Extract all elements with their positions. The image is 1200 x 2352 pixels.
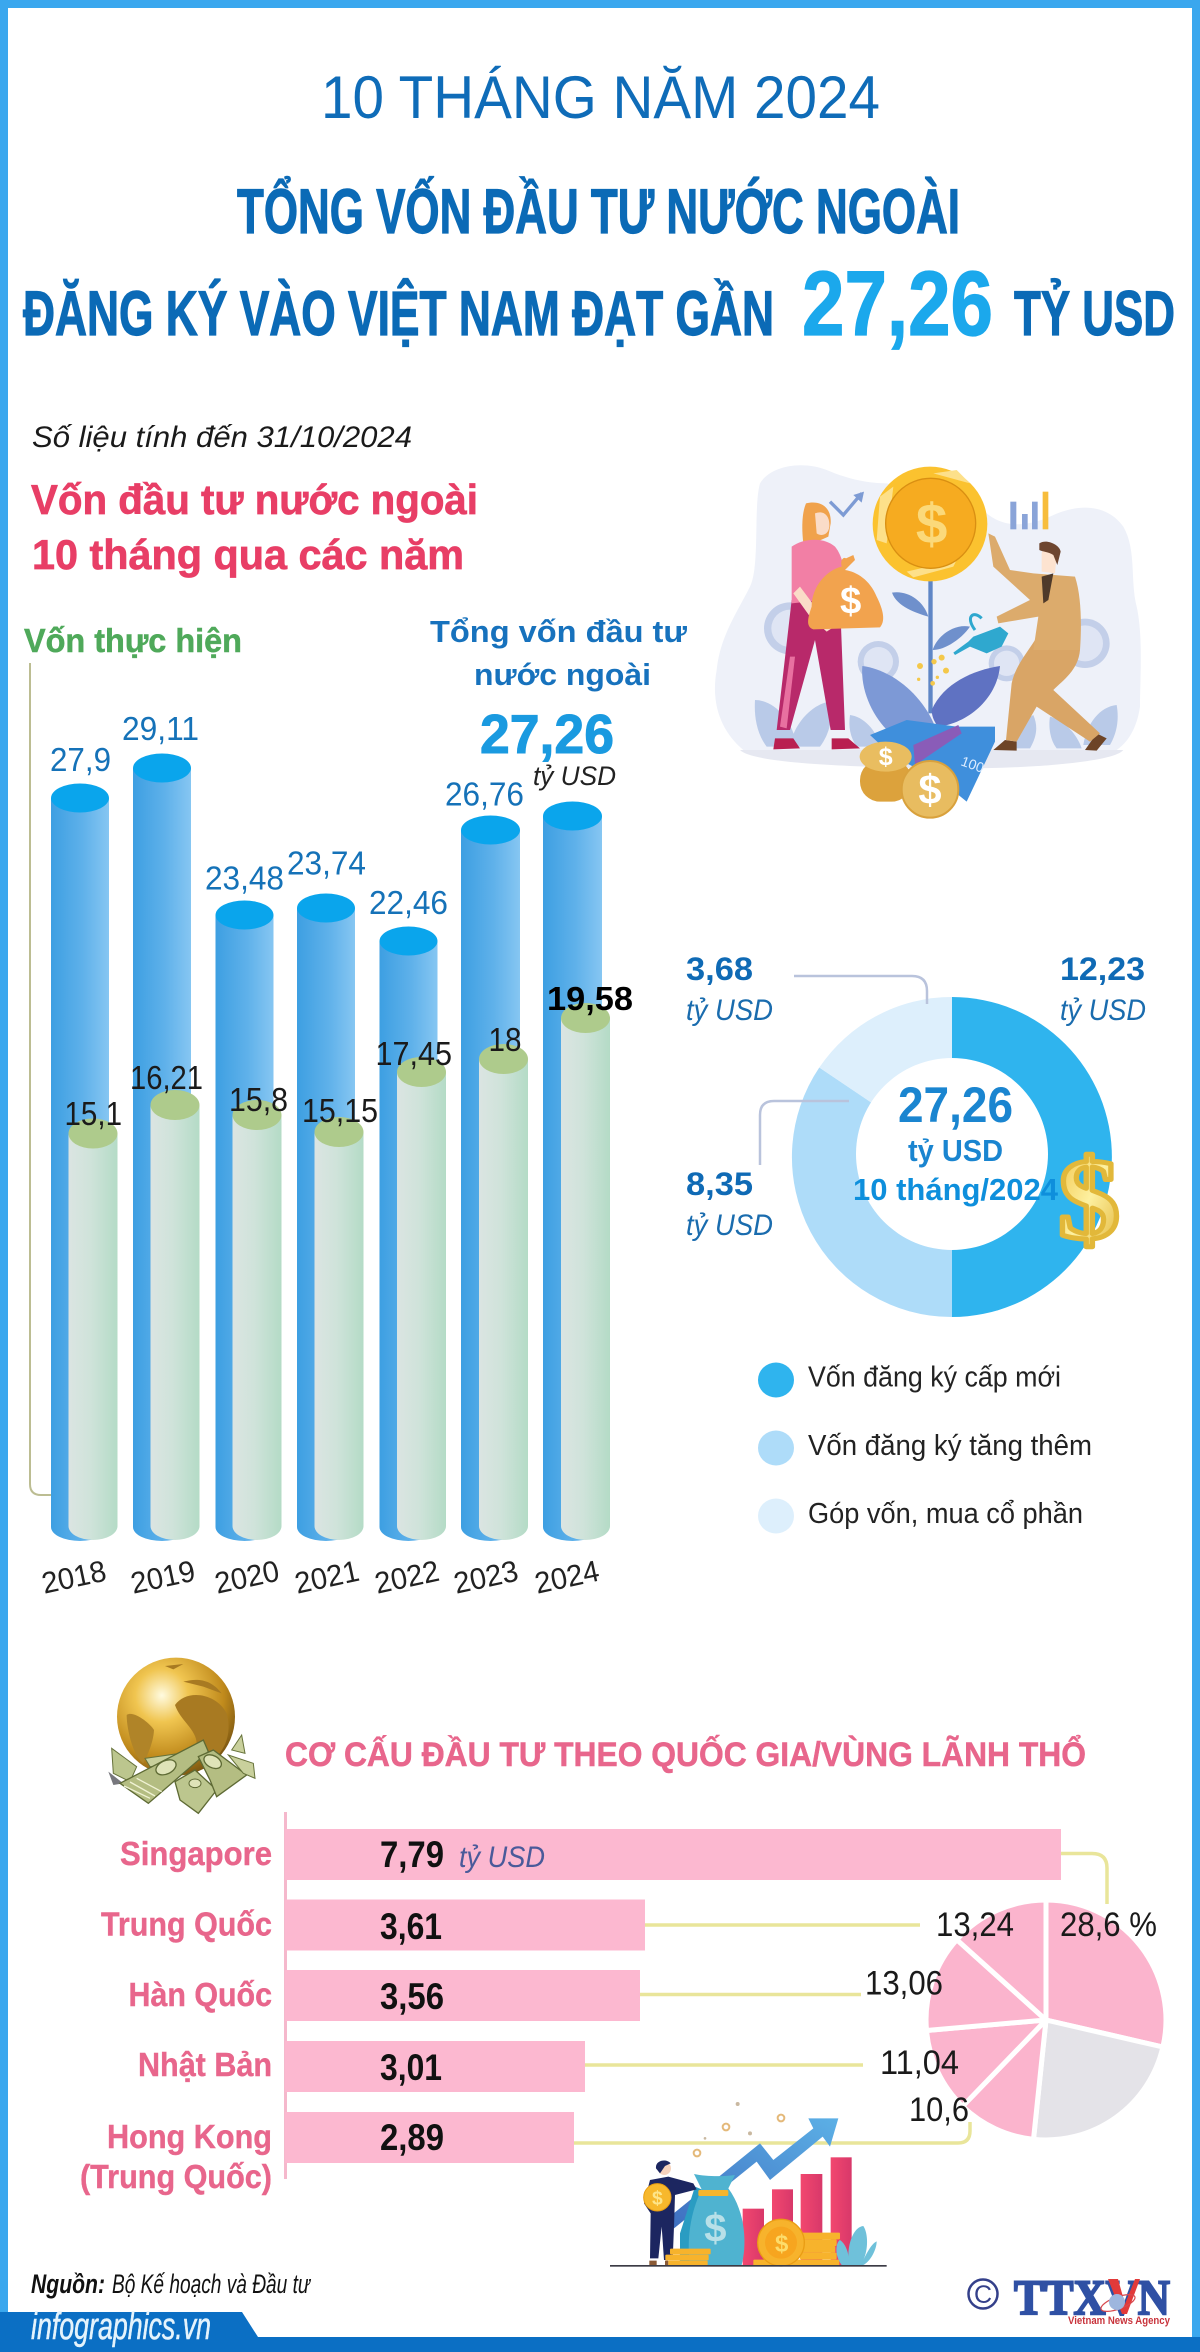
title: period: 10 THÁNG NĂM 2024 <box>321 64 880 131</box>
country labels <box>80 1835 272 2195</box>
cylinder 2024: 2024 <box>532 1555 602 1601</box>
bar values: 3,01 <box>380 2047 442 2088</box>
country labels: (Trung Quốc) <box>80 2158 272 2195</box>
section heading: foreign investment by year: Vốn đầu tư nước ngoài <box>31 476 478 523</box>
cylinder 2020: 15,8 <box>229 1081 288 1118</box>
woman figure <box>773 502 860 749</box>
bar chart: cylinders by year <box>39 710 633 1601</box>
donut value labels: 12,23 <box>1060 951 1145 987</box>
cylinder 2024 <box>532 802 633 1601</box>
illustration: people growing money tree: $ <box>916 493 947 556</box>
title: main heading: ĐĂNG KÝ VÀO VIỆT NAM ĐẠT GẦN <box>23 278 774 349</box>
title: main heading <box>23 176 1175 355</box>
leader line for realized capital <box>30 663 86 1495</box>
money and coins <box>860 720 995 818</box>
money and coins: 100 <box>959 753 987 776</box>
bar values: 3,56 <box>380 1976 444 2017</box>
pie value labels: 13,24 <box>936 1906 1014 1944</box>
cylinder 2018: 15,1 <box>64 1095 122 1132</box>
source note: Nguồn: <box>31 2269 105 2299</box>
callout: total foreign investment 2024: nước ngoài <box>474 657 651 692</box>
cylinder 2023: 2023 <box>451 1555 521 1601</box>
money and coins: $ <box>879 743 893 771</box>
donut value labels <box>686 951 1146 1242</box>
logo: TTXVN: Vietnam News Agency <box>1068 2315 1171 2327</box>
pie connector lines <box>574 1854 1107 2143</box>
cylinder 2021: 23,74 <box>287 844 366 882</box>
cylinder 2024: 19,58 <box>547 980 633 1017</box>
callout: total foreign investment 2024 <box>430 614 688 791</box>
cylinder 2022: 22,46 <box>369 884 448 921</box>
logo: TTXVN: TTXVN <box>1014 2269 1170 2325</box>
cylinder 2018 <box>39 741 122 1601</box>
panel: horizontal bar chart by country: tỷ USD <box>459 1841 545 1874</box>
bar values <box>380 1834 444 2158</box>
donut value labels: tỷ USD <box>686 994 773 1027</box>
pie value labels: 13,06 <box>865 1964 943 2002</box>
title: main heading: 27,26 <box>802 253 993 355</box>
country labels: Trung Quốc <box>101 1906 272 1942</box>
panel: horizontal bar chart by country <box>80 1812 1061 2195</box>
logo: TTXVN <box>968 2269 1171 2327</box>
cylinder 2020: 23,48 <box>205 860 284 896</box>
label: realized capital: Vốn thực hiện <box>24 622 242 659</box>
bar values: 7,79 <box>380 1834 444 1875</box>
bar values: 2,89 <box>380 2117 444 2158</box>
donut centre text: 27,26 <box>898 1077 1013 1133</box>
cylinder 2019: 29,11 <box>122 710 199 747</box>
pie value labels: 10,6 <box>909 2091 969 2129</box>
icon: gold dollar sign: $ <box>1058 1136 1120 1263</box>
cylinder 2023: 18 <box>488 1021 522 1058</box>
illustration: people growing money tree <box>715 465 1141 818</box>
footer website: infographics.vn <box>31 2306 211 2348</box>
pie chart: country shares <box>926 1900 1166 2140</box>
donut value labels: tỷ USD <box>686 1209 773 1242</box>
callout: total foreign investment 2024: 27,26 <box>480 703 614 765</box>
cylinder 2020: 2020 <box>212 1555 282 1601</box>
legend for donut <box>758 1362 1092 1534</box>
cylinder 2021 <box>287 844 378 1601</box>
cylinder 2018: 27,9 <box>50 741 111 778</box>
section heading: foreign investment by year <box>31 476 478 578</box>
illustration: growth chart with businessman: $ <box>775 2231 788 2258</box>
cylinder 2020 <box>205 860 288 1601</box>
donut chart: capital composition <box>792 997 1112 1317</box>
legend for donut: Vốn đăng ký cấp mới <box>808 1362 1061 1394</box>
leader lines for donut <box>760 976 927 1165</box>
illustration: growth chart with businessman: $ <box>652 2188 663 2209</box>
donut centre text <box>853 1077 1059 1207</box>
cylinder 2019: 2019 <box>128 1555 198 1601</box>
date note: Số liệu tính đến 31/10/2024 <box>32 421 412 454</box>
country labels: Hàn Quốc <box>128 1976 272 2013</box>
illustration: growth chart with businessman: $ <box>704 2207 726 2251</box>
donut centre text: 10 tháng/2024 <box>853 1172 1059 1207</box>
cylinder 2019: 16,21 <box>130 1059 203 1096</box>
cylinder 2023: 26,76 <box>445 776 524 812</box>
illustration: people growing money tree: $ <box>840 579 861 622</box>
illustration: growth chart with businessman <box>610 2102 887 2267</box>
man figure <box>988 533 1107 751</box>
cylinder 2021: 15,15 <box>302 1092 378 1129</box>
legend for donut: Vốn đăng ký tăng thêm <box>808 1430 1092 1462</box>
pie value labels: 11,04 <box>880 2044 959 2082</box>
cylinder 2023 <box>445 776 528 1601</box>
country labels: Hong Kong <box>107 2118 272 2155</box>
legend for donut: Góp vốn, mua cổ phần <box>808 1498 1083 1530</box>
cylinder 2019 <box>122 710 203 1601</box>
cylinder 2018: 2018 <box>39 1555 109 1601</box>
donut value labels: 3,68 <box>686 951 753 987</box>
country labels: Nhật Bản <box>138 2046 272 2083</box>
section heading: foreign investment by year: 10 tháng qua các năm <box>32 531 464 578</box>
pie value labels: 28,6 % <box>1060 1906 1157 1944</box>
bar values: 3,61 <box>380 1906 442 1947</box>
callout: total foreign investment 2024: Tổng vốn đầu tư <box>430 614 688 649</box>
cylinder 2022 <box>369 884 452 1601</box>
icon: golden globe with money <box>108 1658 255 1813</box>
cylinder 2022: 17,45 <box>376 1035 452 1072</box>
money and coins: $ <box>918 766 942 813</box>
country labels: Singapore <box>120 1835 272 1872</box>
donut value labels: tỷ USD <box>1060 994 1146 1027</box>
source note: Bộ Kế hoạch và Đầu tư <box>112 2269 311 2299</box>
cylinder 2021: 2021 <box>292 1555 362 1601</box>
logo: TTXVN: C <box>974 2281 992 2309</box>
footer band <box>0 2312 1200 2352</box>
section heading: investment by country: CƠ CẤU ĐẦU TƯ THEO QUỐC GIA/VÙNG LÃNH THỔ <box>285 1735 1086 1774</box>
donut value labels: 8,35 <box>686 1166 753 1202</box>
pie value labels <box>865 1906 1157 2129</box>
cylinder 2022: 2022 <box>372 1555 442 1601</box>
callout: total foreign investment 2024: tỷ USD <box>533 761 616 791</box>
donut centre text: tỷ USD <box>908 1133 1003 1168</box>
